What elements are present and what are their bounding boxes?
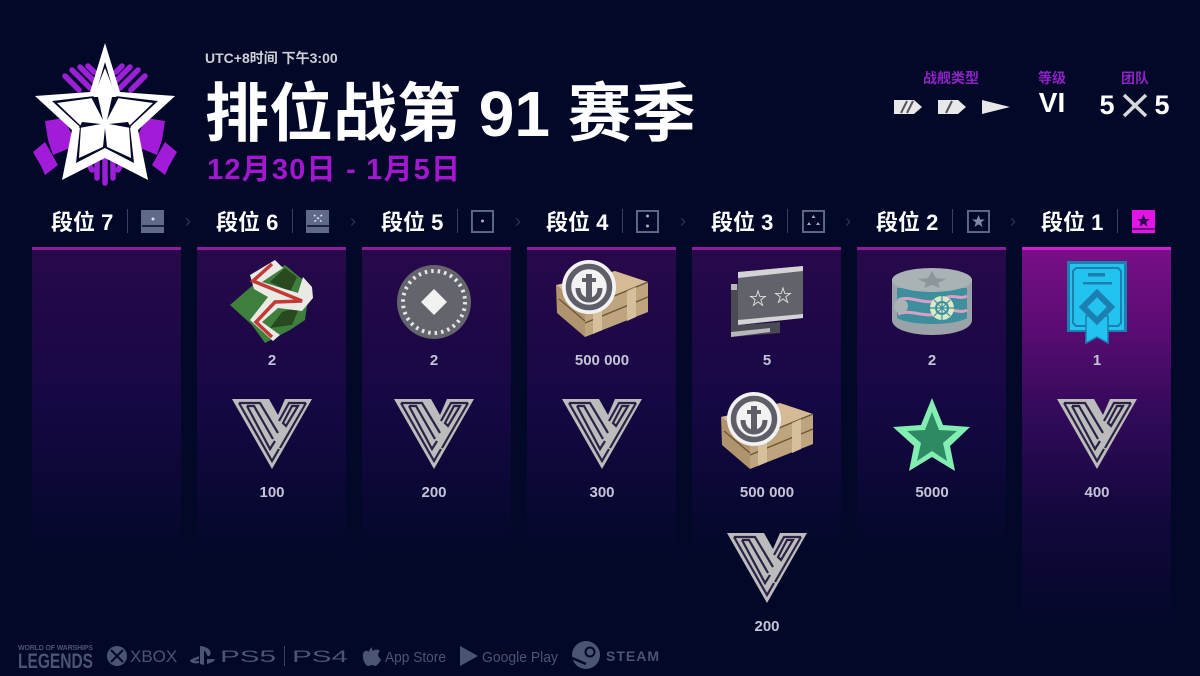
rank 4 insignia <box>637 211 658 232</box>
arrow: › <box>185 211 191 231</box>
icon: cruiser class <box>938 100 966 114</box>
date range: 12月30日 - 1月5日 <box>207 154 460 186</box>
rank 5 insignia <box>472 211 493 232</box>
panel: rank 3: 段位 3 <box>711 210 773 235</box>
logo: steam: STEAM <box>606 648 660 664</box>
logo: playstation <box>190 646 348 666</box>
info: tier: 等级 <box>1038 70 1066 86</box>
logo: app store: App Store <box>385 649 446 666</box>
emblem purple hatching <box>65 66 145 183</box>
icon: battleship class <box>982 100 1010 114</box>
amount: 200 <box>754 618 780 635</box>
rank 1 insignia <box>1132 210 1155 233</box>
icon: container <box>892 268 972 335</box>
arrow: › <box>1010 211 1016 231</box>
icon: ranked token <box>727 533 807 603</box>
icon: signal <box>397 265 471 339</box>
panel: rank 7 <box>32 209 181 557</box>
info: team size <box>1099 70 1170 120</box>
amount: 400 <box>1084 484 1110 501</box>
info: ship types <box>894 70 1010 114</box>
info: team size: 5 <box>1154 90 1170 120</box>
icon: destroyer class <box>894 100 922 114</box>
icon: ranked token <box>394 399 474 469</box>
logo: steam <box>572 641 660 669</box>
info: tier: VI <box>1039 87 1065 118</box>
panel: rank 7: 段位 7 <box>51 210 113 235</box>
arrow: › <box>515 211 521 231</box>
logo: app store <box>363 647 446 666</box>
amount: 2 <box>928 352 936 369</box>
rank 7 insignia <box>142 211 164 232</box>
rank 3 insignia <box>803 211 824 232</box>
logo: google play <box>460 646 558 666</box>
title: 排位战第 91 赛季 <box>205 78 696 150</box>
panel: rank 2: 段位 2 <box>876 210 938 235</box>
panel: rank 5 <box>362 209 511 557</box>
info: tier <box>1038 70 1066 118</box>
amount: 2 <box>430 352 438 369</box>
panel: rank 1 <box>1022 209 1171 632</box>
icon: credits crate <box>556 260 648 337</box>
arrow: › <box>845 211 851 231</box>
icon: commander flags: ☆ <box>774 286 792 306</box>
emblem ribbons <box>33 118 177 175</box>
panel: rank 1: 段位 1 <box>1041 210 1103 235</box>
logo: game title: LEGENDS <box>18 650 93 673</box>
logo: xbox <box>107 646 177 666</box>
amount: 200 <box>421 484 447 501</box>
amount: 5 <box>763 352 771 369</box>
logo: game title: WORLD OF WARSHIPS <box>18 645 93 652</box>
icon: ranked token <box>232 399 312 469</box>
panel: rank 2 <box>857 209 1006 557</box>
arrow: › <box>680 211 686 231</box>
panel: rank 6 <box>197 209 346 557</box>
logo: game title <box>18 645 93 673</box>
panel: rank 6: 段位 6 <box>216 210 278 235</box>
icon: commander flags: ☆ <box>749 289 767 309</box>
amount: 300 <box>589 484 615 501</box>
amount: 2 <box>268 352 276 369</box>
panel: rank 5: 段位 5 <box>381 210 443 235</box>
logo: playstation: PS4 <box>292 647 348 666</box>
info: ship types: 战舰类型 <box>923 70 979 86</box>
time note: UTC+8时间 下午3:00 <box>205 50 338 66</box>
amount: 500 000 <box>740 484 794 501</box>
icon: ranked token <box>1057 399 1137 469</box>
emblem star <box>35 43 175 180</box>
logo: ranked star emblem <box>33 43 177 183</box>
arrow: › <box>350 211 356 231</box>
icon: certificate <box>1067 261 1127 343</box>
icon: commander flags <box>731 266 803 337</box>
amount: 1 <box>1093 352 1101 369</box>
icon: credits crate <box>721 392 813 469</box>
footer: platform logos <box>18 641 660 673</box>
panel: rank 4: 段位 4 <box>546 210 609 235</box>
info: team size: 5 <box>1099 90 1115 120</box>
rank 6 insignia <box>307 211 329 232</box>
logo: playstation: PS5 <box>220 647 276 666</box>
amount: 500 000 <box>575 352 629 369</box>
amount: 100 <box>259 484 285 501</box>
info: team size: 团队 <box>1121 70 1149 86</box>
panel: rank 4 <box>527 209 676 557</box>
panel: rank 3 <box>692 209 841 635</box>
logo: google play: Google Play <box>482 649 558 666</box>
icon: green star <box>893 398 970 471</box>
logo: xbox: XBOX <box>130 647 177 666</box>
amount: 5000 <box>915 484 949 501</box>
icon: camouflage <box>230 260 313 343</box>
rank 2 insignia <box>968 211 989 232</box>
icon: ranked token <box>562 399 642 469</box>
